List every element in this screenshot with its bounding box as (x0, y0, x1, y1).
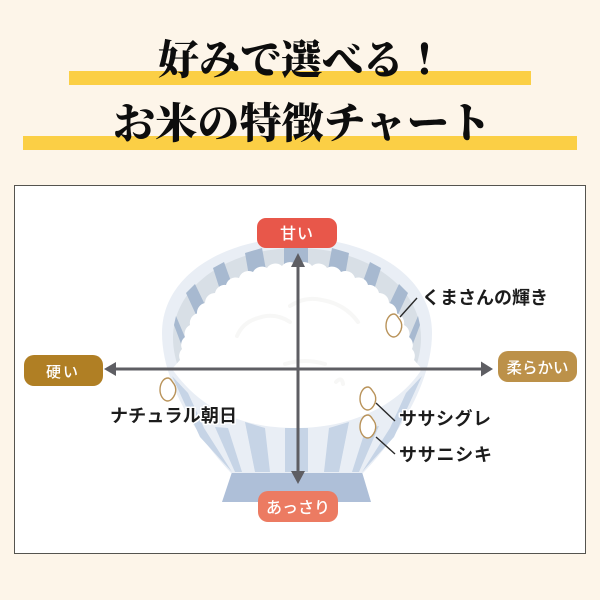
pill: light: あっさり (266, 499, 330, 517)
bowl foot (222, 472, 371, 502)
rice marker: Sasanishiki (360, 415, 492, 465)
arrow: vertical axis (291, 253, 305, 484)
rice marker: Kumasan no Kagayaki: くまさんの輝き (422, 288, 548, 308)
rice marker: Natural Asahi (110, 378, 237, 426)
rice marker: Natural Asahi: ナチュラル朝日 (110, 406, 237, 426)
pill: hard: 硬い (46, 364, 80, 381)
panel: chart (14, 186, 586, 554)
title line 2: お米の特徴チャート (113, 101, 491, 148)
pill: soft: 柔らかい (506, 359, 569, 377)
rice (172, 262, 422, 428)
bowl stripes (172, 376, 422, 472)
pill: light (258, 491, 338, 522)
title line 1 (69, 37, 531, 85)
rice marker: Sasashigure (360, 387, 491, 429)
rice marker: Sasanishiki: ササニシキ (399, 445, 492, 465)
pill: soft (498, 351, 577, 382)
rim stripes (174, 248, 420, 349)
rice marker: Sasashigure: ササシグレ (399, 408, 491, 429)
rice shadows (237, 299, 358, 384)
bowl body (162, 238, 432, 473)
pill: hard (24, 355, 103, 386)
title line 1: 好みで選べる！ (158, 37, 445, 83)
illustration: rice bowl (162, 238, 432, 502)
rice marker: Kumasan no Kagayaki (386, 288, 548, 337)
rim band (173, 248, 421, 372)
arrow: horizontal axis (104, 362, 493, 376)
pill: sweet (257, 218, 337, 248)
title line 2 (23, 101, 577, 150)
pill: sweet: 甘い (280, 225, 314, 243)
